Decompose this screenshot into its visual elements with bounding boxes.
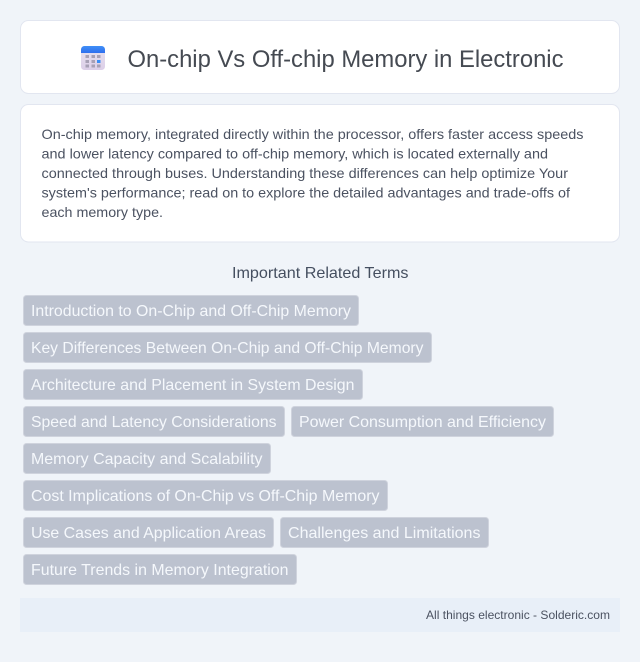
icon: memory chip calendar grid [81, 46, 105, 70]
footer: All things electronic - Solderic.com [426, 608, 610, 622]
tag: cost implications [24, 480, 388, 510]
panel: related terms tags [24, 296, 554, 584]
tag: memory capacity: Memory Capacity and Scalability [31, 451, 262, 468]
footer [20, 598, 620, 632]
panel: header card [20, 20, 620, 94]
tag: future trends: Future Trends in Memory Integration [31, 562, 288, 579]
title: On-chip Vs Off-chip Memory in Electronic [128, 46, 564, 73]
tag: cost implications: Cost Implications of On-Chip vs Off-Chip Memory [31, 488, 380, 505]
tag: key differences: Key Differences Between On-Chip and Off-Chip Memory [31, 340, 424, 357]
text block: introduction: system's performance; read on to explore the detailed advantages and trade-offs of [42, 184, 570, 200]
heading: important related terms: Important Related Terms [232, 265, 408, 282]
text block: introduction: connected through buses. Understanding these differences can help optimize Your [42, 165, 568, 181]
tag: memory capacity [24, 444, 270, 474]
tag: architecture [24, 370, 362, 400]
text block: introduction [42, 126, 584, 220]
tag: speed and latency [24, 406, 284, 436]
tag: power consumption: Power Consumption and Efficiency [299, 414, 546, 431]
text block: introduction: and lower latency compared to off-chip memory, which is located externally and [42, 146, 548, 162]
tag: architecture: Architecture and Placement in System Design [31, 377, 354, 394]
tag: power consumption [292, 406, 554, 436]
tag: introduction [24, 296, 358, 326]
tag: key differences [24, 332, 432, 362]
tag: use cases: Use Cases and Application Areas [31, 525, 266, 542]
tag: speed and latency: Speed and Latency Considerations [31, 414, 276, 431]
tag: use cases [24, 518, 274, 548]
text block: introduction: On-chip memory, integrated directly within the processor, offers faster access speeds [42, 126, 584, 142]
text block: introduction: each memory type. [42, 204, 163, 220]
tag: future trends [24, 554, 296, 584]
tag: challenges: Challenges and Limitations [288, 525, 480, 542]
tag: introduction: Introduction to On-Chip and Off-Chip Memory [31, 303, 351, 320]
tag: challenges [280, 518, 488, 548]
panel: introduction paragraph card [20, 104, 620, 242]
